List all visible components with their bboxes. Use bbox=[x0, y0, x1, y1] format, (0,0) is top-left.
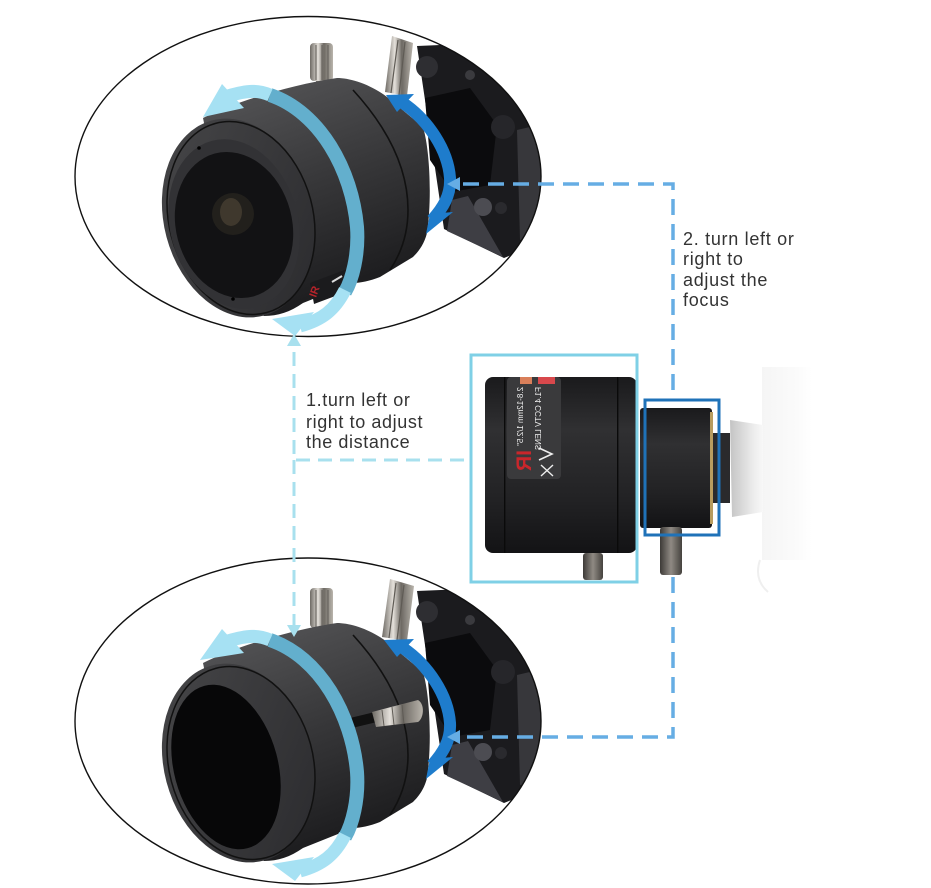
lens label bbox=[507, 377, 561, 479]
text: step 2 focus instruction: right to bbox=[683, 249, 744, 269]
knob: large rear pin bbox=[382, 579, 414, 641]
arrow: light blue rotation arc bbox=[200, 629, 357, 881]
lens label: IR bbox=[513, 450, 536, 471]
knob: small rear pin bbox=[310, 588, 333, 628]
knob: large rear pin bbox=[385, 36, 413, 96]
text: step 1 distance instruction: the distance bbox=[306, 432, 410, 452]
IR label on barrel bbox=[308, 268, 350, 304]
light blue highlight box bbox=[471, 355, 637, 582]
connector: focus dashed line to top lens bbox=[447, 177, 673, 390]
ellipse outline bbox=[75, 558, 541, 884]
IR label on barrel: IR bbox=[308, 285, 323, 299]
barrel step lines bbox=[353, 635, 408, 815]
front zoom barrel bbox=[485, 377, 637, 553]
ellipse outline bbox=[75, 16, 541, 336]
panel: top lens close-up bbox=[75, 16, 560, 336]
front knob bbox=[583, 553, 603, 580]
text: step 2 focus instruction: adjust the bbox=[683, 270, 768, 290]
barrel step lines bbox=[353, 90, 408, 270]
blurred camera body bbox=[730, 367, 812, 592]
lens barrel bbox=[203, 78, 430, 316]
panel: bottom lens close-up bbox=[75, 558, 560, 884]
lens label: 2.8-12mm 1/2.5" bbox=[516, 387, 525, 446]
knob: small top pin bbox=[310, 43, 333, 98]
connector: distance dashed lines to both lenses bbox=[287, 334, 464, 637]
lens front face bbox=[140, 646, 336, 880]
connector: focus dashed line to bottom lens bbox=[447, 577, 673, 744]
panel: side view of lens on camera bbox=[471, 355, 812, 592]
dark blue highlight box bbox=[645, 400, 719, 535]
lens thread bbox=[713, 433, 730, 503]
text: step 2 focus instruction: 2. turn left or bbox=[683, 229, 795, 249]
rear knob bbox=[660, 527, 682, 575]
text: step 2 focus instruction: focus bbox=[683, 290, 730, 310]
lens barrel bbox=[203, 623, 430, 861]
rear focus barrel bbox=[640, 408, 713, 528]
knob: side pin bbox=[350, 700, 423, 728]
arrow: dark blue rotation arc bbox=[384, 639, 453, 779]
text: step 1 distance instruction: right to adjust bbox=[306, 412, 423, 432]
text: step 1 distance instruction: 1.turn left or bbox=[306, 390, 410, 410]
lens label: F1.4 CCTV LENS bbox=[534, 387, 543, 450]
mounting plate bbox=[416, 590, 540, 803]
lens front face bbox=[140, 101, 336, 335]
mounting plate bbox=[416, 45, 540, 258]
arrow: dark blue rotation arc bbox=[386, 94, 453, 234]
arrow: light blue rotation arc bbox=[203, 84, 357, 336]
